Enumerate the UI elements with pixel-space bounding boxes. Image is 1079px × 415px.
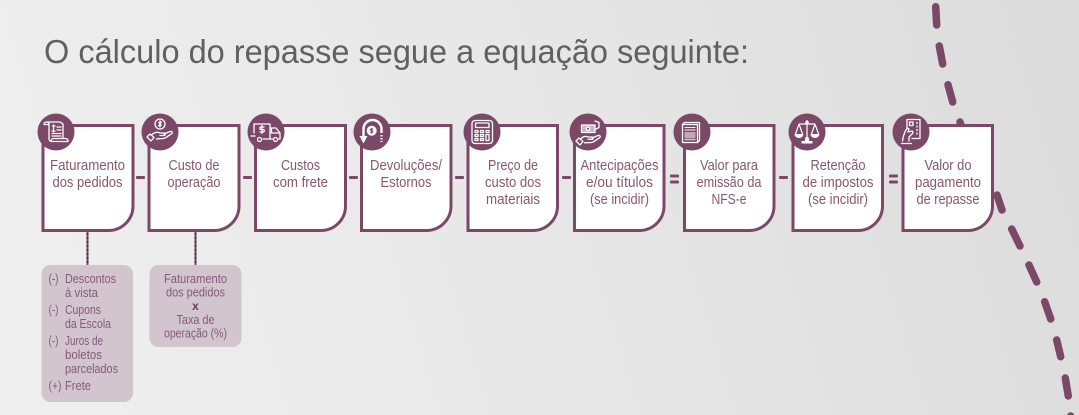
- card: faturamento dos pedidos: Faturamento: [50, 157, 125, 174]
- panel: faturamento details: Descontos: [65, 272, 116, 286]
- panel: custo de operação details: [150, 265, 242, 347]
- operator: equals: [889, 174, 898, 184]
- panel: custo de operação details: x: [192, 299, 199, 313]
- card: valor para emissão da NFS-e: emissão da: [696, 174, 762, 191]
- card: valor do pagamento de repasse: Valor do: [924, 157, 972, 174]
- card: retenção de impostos: [788, 114, 882, 230]
- card: valor para emissão da NFS-e: [674, 114, 774, 230]
- card: retenção de impostos: (se incidir): [808, 191, 868, 208]
- card: preço de custo dos materiais: custo dos: [485, 174, 541, 191]
- operator: equals: [670, 174, 679, 184]
- connector: custo de operação to details: [194, 232, 196, 265]
- card: custo de operação: Custo de: [168, 157, 220, 174]
- connector: faturamento to details: [86, 232, 88, 265]
- card: valor do pagamento de repasse: pagamento: [915, 174, 981, 191]
- card: preço de custo dos materiais: materiais: [486, 191, 540, 208]
- panel: faturamento details: parcelados: [65, 362, 118, 376]
- card: retenção de impostos: Retenção: [810, 157, 866, 174]
- card: devoluções/estornos: Estornos: [380, 174, 432, 191]
- dashed curve: [936, 7, 1071, 415]
- panel: faturamento details: (-): [48, 272, 58, 286]
- panel: faturamento details: à vista: [65, 286, 98, 300]
- icon: invoice scroll: [44, 122, 68, 142]
- panel: faturamento details: Juros de: [65, 334, 103, 348]
- card: valor do pagamento de repasse: [892, 114, 992, 230]
- icon: balance scale: [794, 120, 820, 144]
- card: valor para emissão da NFS-e: Valor para: [700, 157, 759, 174]
- card: valor do pagamento de repasse: de repasse: [916, 191, 980, 208]
- icon: hand receiving banknotes: [576, 121, 600, 145]
- panel: faturamento details: (+): [48, 379, 62, 393]
- operator: minus: [136, 176, 145, 179]
- title: O cálculo do repasse segue a equação seguinte:: [44, 34, 749, 71]
- panel: faturamento details: (-): [48, 303, 58, 317]
- operator: minus: [243, 176, 252, 179]
- card: antecipações e/ou títulos: (se incidir): [590, 191, 649, 208]
- card: custos com frete: com frete: [273, 174, 328, 191]
- card: antecipações e/ou títulos: Antecipações: [580, 157, 658, 174]
- operator: minus: [562, 176, 571, 179]
- operator: minus: [455, 176, 464, 179]
- icon: return arrow with coin: [360, 120, 382, 144]
- card: devoluções/estornos: Devoluções/: [370, 157, 443, 174]
- panel: faturamento details: Cupons: [65, 303, 101, 317]
- panel: faturamento details: [42, 265, 133, 402]
- card: custos com frete: Custos: [281, 157, 320, 174]
- card: valor para emissão da NFS-e: NFS-e: [712, 191, 746, 208]
- icon: calculator: [472, 120, 492, 144]
- panel: custo de operação details: Taxa de: [176, 313, 215, 327]
- card: custos com frete: [248, 114, 346, 230]
- card: preço de custo dos materiais: [464, 114, 558, 230]
- panel: faturamento details: da Escola: [65, 317, 111, 331]
- card: retenção de impostos: de impostos: [802, 174, 874, 191]
- card: faturamento dos pedidos: dos pedidos: [52, 174, 122, 191]
- icon: hand holding card: [902, 120, 920, 144]
- panel: custo de operação details: dos pedidos: [166, 286, 225, 300]
- panel: faturamento details: (-): [48, 334, 58, 348]
- icon: hand with coin: [147, 119, 172, 141]
- panel: custo de operação details: operação (%): [164, 326, 227, 340]
- icon: document stack: [682, 122, 700, 142]
- panel: custo de operação details: Faturamento: [164, 272, 227, 286]
- operator: minus: [349, 176, 358, 179]
- card: antecipações e/ou títulos: [570, 114, 664, 230]
- card: preço de custo dos materiais: Preço de: [488, 157, 538, 174]
- panel: faturamento details: boletos: [65, 348, 102, 362]
- card: custo de operação: operação: [168, 174, 220, 191]
- icon: delivery truck: [251, 124, 280, 142]
- card: devoluções/estornos: [354, 114, 451, 230]
- panel: faturamento details: Frete: [65, 379, 91, 393]
- card: antecipações e/ou títulos: e/ou títulos: [586, 174, 653, 191]
- card: faturamento dos pedidos: [38, 114, 133, 230]
- operator: minus: [779, 176, 788, 179]
- card: custo de operação: [142, 114, 239, 230]
